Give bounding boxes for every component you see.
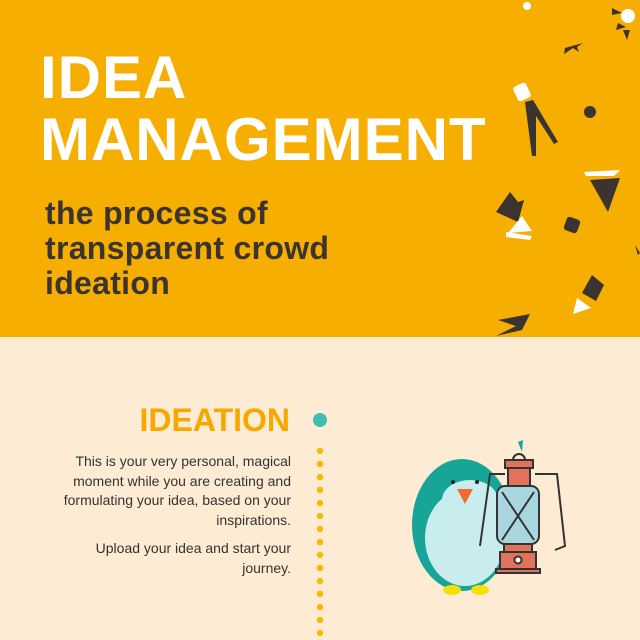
subtitle: the process of: [45, 195, 268, 231]
header band: [0, 0, 640, 337]
subtitle: [45, 195, 329, 301]
title: MANAGEMENT: [40, 106, 487, 173]
decorative shapes: [496, 2, 640, 336]
title: IDEA: [40, 44, 187, 111]
section heading: IDEATION: IDEATION: [139, 402, 290, 438]
text block: call to action: journey.: [242, 560, 291, 576]
timeline dot: [313, 413, 327, 427]
text block: call to action: Upload your idea and start your: [96, 540, 291, 556]
dotted timeline: [316, 448, 324, 636]
text block: description: This is your very personal, magical moment while you are creating and formulating your idea, based on your inspirations.: [64, 453, 291, 528]
title: [40, 44, 487, 173]
subtitle: ideation: [45, 265, 170, 301]
subtitle: transparent crowd: [45, 230, 329, 266]
text block: call to action: [96, 540, 291, 576]
icon: penguin with lantern: [412, 440, 566, 595]
